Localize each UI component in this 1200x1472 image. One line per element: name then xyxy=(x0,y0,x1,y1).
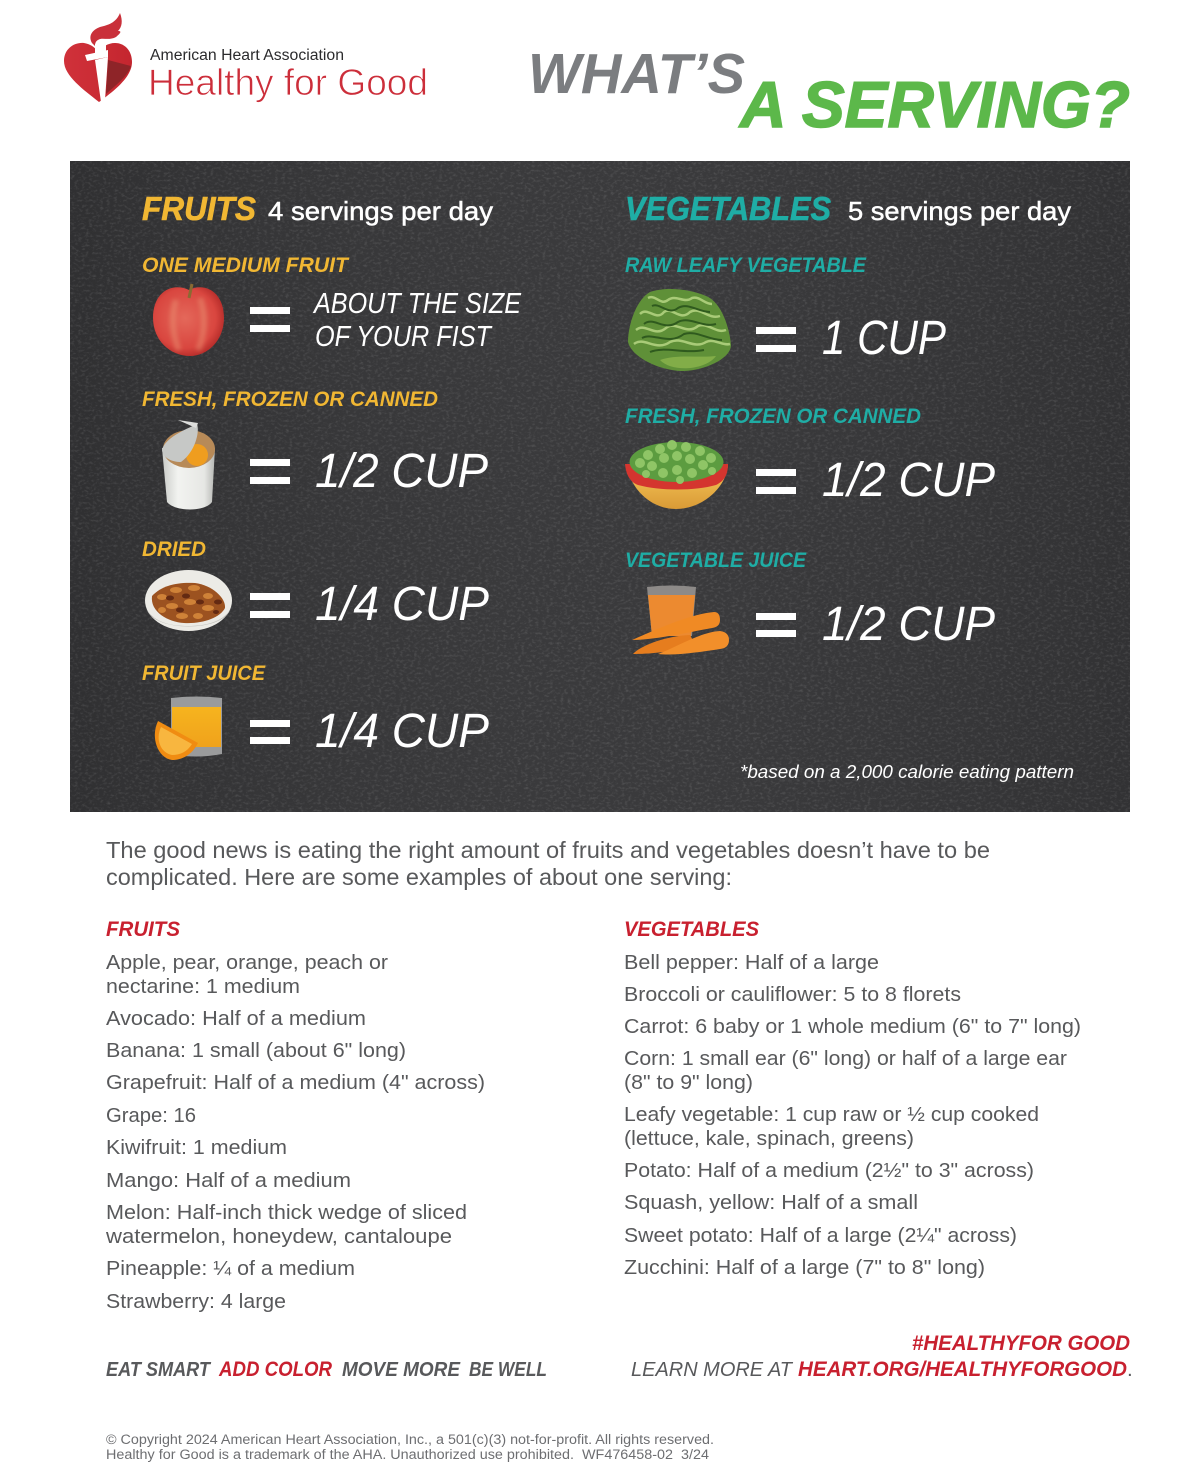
text: Healthy for Good: Healthy for Good xyxy=(148,62,428,103)
row: fresh, frozen or canned fruit xyxy=(142,387,488,510)
fruit list items: Grape: 16 xyxy=(106,1104,196,1127)
fruit list items: Melon: Half-inch thick wedge of sliced xyxy=(106,1201,467,1224)
fruit list items: Avocado: Half of a medium xyxy=(106,1007,366,1030)
fruit list items: Strawberry: 4 large xyxy=(106,1290,286,1313)
icon: equals xyxy=(250,307,290,332)
vegetable list items: Bell pepper: Half of a large xyxy=(624,951,879,974)
icon: equals xyxy=(756,469,796,494)
hashtag and learn more link: HEART.ORG/HEALTHYFORGOOD xyxy=(798,1358,1127,1381)
tagline: eat smart, add color, move more, be well xyxy=(106,1358,547,1381)
panel: daily servings chalkboard xyxy=(70,161,1130,812)
icon: orange juice and slice xyxy=(155,696,222,760)
intro text: The good news is eating the right amount of fruits and vegetables doesn’t have to be xyxy=(106,837,990,863)
title: What's a serving? xyxy=(528,42,1130,141)
row: fresh, frozen or canned fruit: FRESH, FROZEN OR CANNED xyxy=(142,387,438,411)
icon: can of peaches xyxy=(162,420,215,510)
vegetable list items: (8" to 9" long) xyxy=(624,1071,753,1094)
vegetable list items: Broccoli or cauliflower: 5 to 8 florets xyxy=(624,983,961,1006)
vegetable list items: Leafy vegetable: 1 cup raw or ½ cup cooked xyxy=(624,1103,1039,1126)
row: dried fruit: 1/4 CUP xyxy=(315,578,489,631)
tagline: eat smart, add color, move more, be well: BE WELL xyxy=(469,1358,547,1381)
fruit list items: Grapefruit: Half of a medium (4" across) xyxy=(106,1071,485,1094)
subheading: 4 servings per day: 4 servings per day xyxy=(268,196,493,226)
logo: American Heart Association Healthy for Good xyxy=(64,13,428,103)
heading: vegetables: VEGETABLES xyxy=(625,190,831,227)
fruit list items: Kiwifruit: 1 medium xyxy=(106,1136,287,1159)
row: one medium fruit: OF YOUR FIST xyxy=(315,321,493,353)
list: fruit serving examples xyxy=(105,918,485,1313)
intro text xyxy=(106,837,990,890)
hashtag and learn more link xyxy=(631,1332,1133,1381)
row: raw leafy vegetable xyxy=(625,253,946,371)
icon: equals xyxy=(250,459,290,484)
text: American Heart Association: American Heart Association xyxy=(150,47,344,64)
row: fresh, frozen or canned vegetables: FRESH, FROZEN OR CANNED xyxy=(625,404,921,428)
hashtag and learn more link: #HEALTHYFOR GOOD xyxy=(912,1332,1130,1355)
row: fruit juice: FRUIT JUICE xyxy=(142,661,266,685)
icon: lettuce xyxy=(628,289,731,371)
icon: equals xyxy=(250,593,290,618)
row: raw leafy vegetable: RAW LEAFY VEGETABLE xyxy=(625,253,867,277)
icon: apple xyxy=(153,284,224,356)
fruit list items: Banana: 1 small (about 6" long) xyxy=(106,1039,406,1062)
vegetable list items: (lettuce, kale, spinach, greens) xyxy=(624,1127,914,1150)
row: one medium fruit xyxy=(142,253,522,356)
footnote: *based on a 2,000 calorie eating pattern xyxy=(740,762,1074,782)
row: raw leafy vegetable: 1 CUP xyxy=(822,312,946,365)
fruit list items: nectarine: 1 medium xyxy=(106,975,300,998)
row: vegetable juice: VEGETABLE JUICE xyxy=(625,548,807,572)
vegetable list items xyxy=(624,951,1081,1279)
icon: equals xyxy=(756,613,796,637)
icon: heart and torch xyxy=(64,13,132,102)
row: dried fruit: DRIED xyxy=(142,537,206,561)
heading: fruits: FRUITS xyxy=(142,190,256,227)
fruits column xyxy=(142,190,522,760)
tagline: eat smart, add color, move more, be well: MOVE MORE xyxy=(342,1358,461,1381)
list: vegetable serving examples xyxy=(624,918,1081,1279)
row: fresh, frozen or canned fruit: 1/2 CUP xyxy=(315,445,488,498)
subheading: 5 servings per day: 5 servings per day xyxy=(848,196,1071,226)
intro text: complicated. Here are some examples of about one serving: xyxy=(106,864,732,890)
fruit list items: Apple, pear, orange, peach or xyxy=(106,951,388,974)
icon: equals xyxy=(756,327,796,352)
row: one medium fruit: ABOUT THE SIZE xyxy=(312,288,522,320)
tagline: eat smart, add color, move more, be well: EAT SMART xyxy=(106,1358,211,1381)
icon: carrot juice and carrots xyxy=(632,586,729,655)
title line: A SERVING?: A SERVING? xyxy=(738,68,1130,141)
hashtag and learn more link: LEARN MORE AT xyxy=(631,1358,793,1381)
row: fruit juice xyxy=(142,661,489,760)
row: one medium fruit: ONE MEDIUM FRUIT xyxy=(142,253,350,277)
icon: equals xyxy=(250,720,290,744)
vegetables column xyxy=(625,190,1074,782)
heading: vegetables list: VEGETABLES xyxy=(624,918,759,941)
fruit list items xyxy=(105,951,485,1313)
fruit list items: watermelon, honeydew, cantaloupe xyxy=(105,1225,452,1248)
icon: bowl of peas xyxy=(625,440,728,509)
vegetable list items: Potato: Half of a medium (2½" to 3" across) xyxy=(624,1159,1034,1182)
vegetable list items: Squash, yellow: Half of a small xyxy=(624,1191,918,1214)
vegetable list items: Carrot: 6 baby or 1 whole medium (6" to 7" long) xyxy=(624,1015,1081,1038)
row: fresh, frozen or canned vegetables: 1/2 CUP xyxy=(822,454,995,507)
row: fruit juice: 1/4 CUP xyxy=(315,705,489,758)
fruit list items: Mango: Half of a medium xyxy=(106,1169,351,1192)
row: fresh, frozen or canned vegetables xyxy=(625,404,995,509)
heading: fruits list: FRUITS xyxy=(106,918,180,941)
tagline: eat smart, add color, move more, be well: ADD COLOR xyxy=(218,1358,333,1381)
vegetable list items: Corn: 1 small ear (6" long) or half of a large ear xyxy=(624,1047,1067,1070)
row: dried fruit xyxy=(142,537,489,631)
icon: bowl of raisins xyxy=(145,570,232,631)
copyright: Healthy for Good is a trademark of the AHA. Unauthorized use prohibited. WF476458-02 3/24 xyxy=(106,1447,710,1462)
title line: WHAT'S: WHAT’S xyxy=(528,42,745,106)
vegetable list items: Zucchini: Half of a large (7" to 8" long) xyxy=(624,1256,985,1279)
fruit list items: Pineapple: ¼ of a medium xyxy=(106,1257,355,1280)
row: vegetable juice xyxy=(625,548,995,655)
hashtag and learn more link: . xyxy=(1127,1358,1133,1381)
vegetable list items: Sweet potato: Half of a large (2¼" across) xyxy=(624,1224,1017,1247)
row: vegetable juice: 1/2 CUP xyxy=(822,598,995,651)
copyright xyxy=(106,1432,714,1462)
copyright: © Copyright 2024 American Heart Association, Inc., a 501(c)(3) not-for-profit. All rights reserved. xyxy=(106,1432,714,1447)
